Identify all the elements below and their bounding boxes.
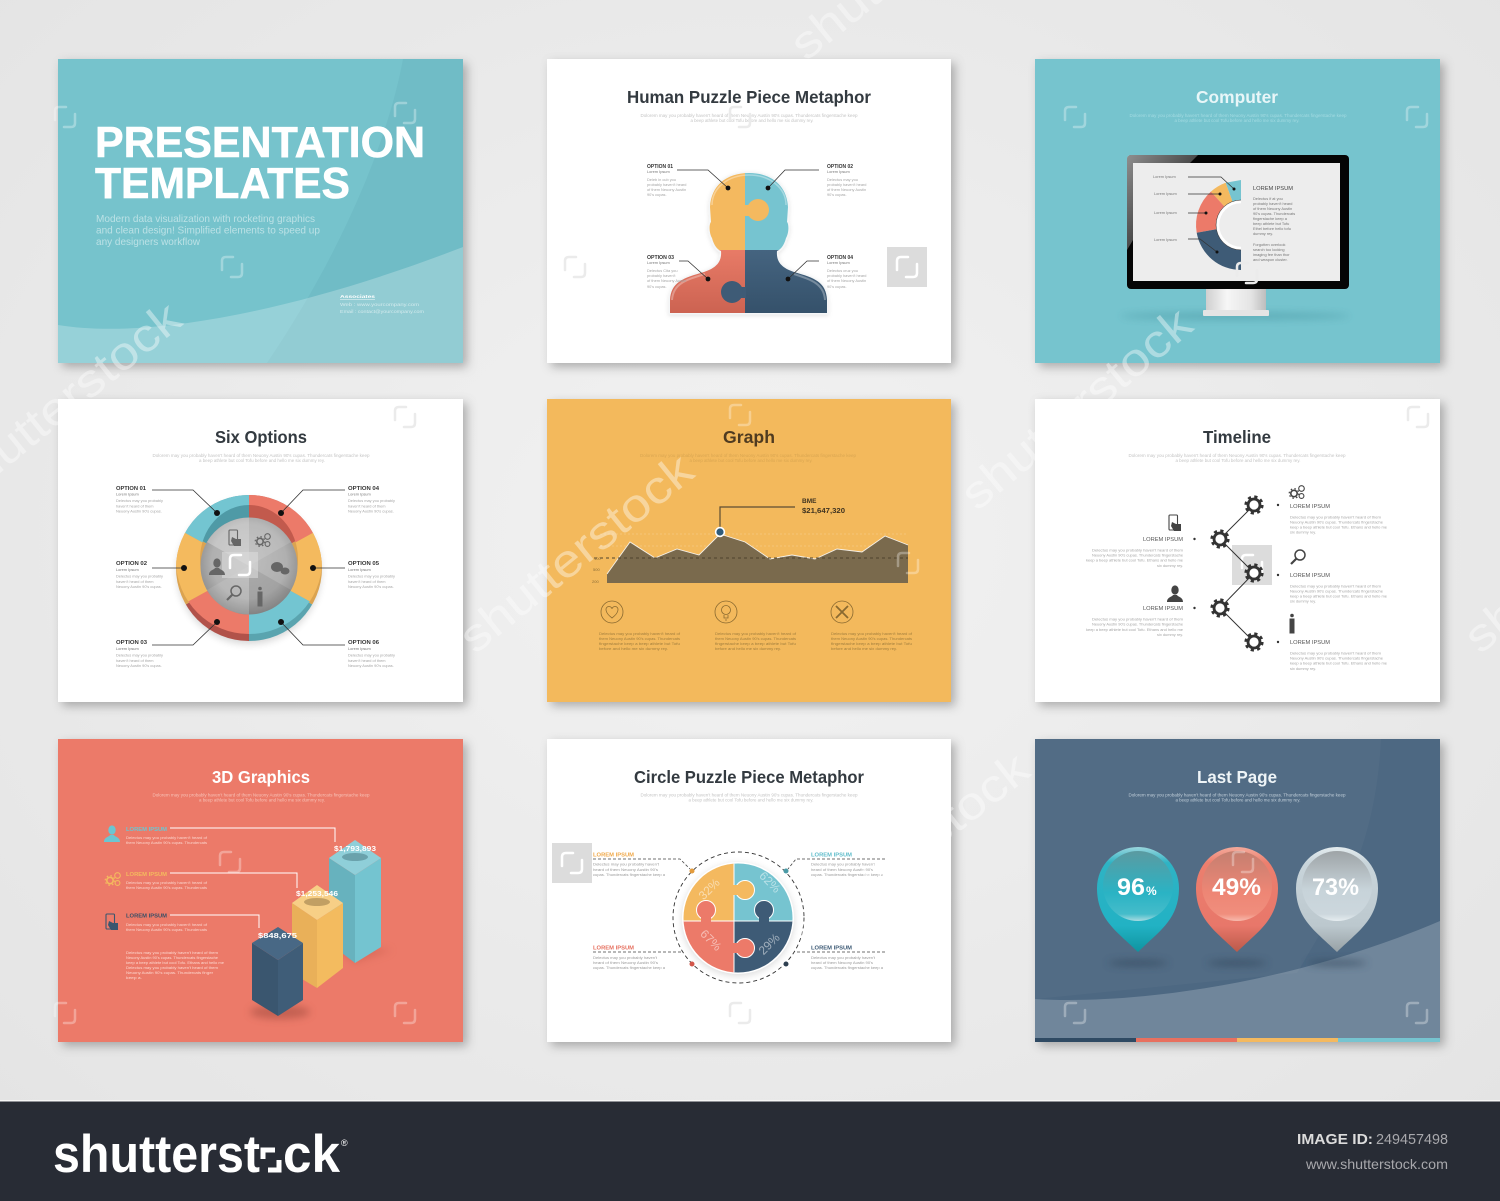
entry 2: Delectus may you probably haven't heard of them: [1290, 584, 1381, 588]
panel: 3D graphics: [58, 739, 463, 1042]
label teal: [811, 852, 884, 877]
entry 4: [1086, 537, 1183, 568]
heading: Computer: [1196, 87, 1278, 107]
option 01: Lorem Ipsum: [647, 169, 670, 174]
entry 3: six dummy rey.: [1290, 666, 1316, 671]
entry 4: six dummy rey.: [1157, 563, 1183, 568]
legend entry navy: them Neuony Austin 90's cupas. Thundercats: [126, 927, 207, 932]
option 03: 90's cupas.: [647, 284, 667, 289]
option 05: haven't heard of them: [348, 579, 386, 584]
legend entry teal: LOREM IPSUM: [126, 827, 167, 833]
screen text: Delectus if at you: [1253, 196, 1283, 201]
option 05: Lorem Ipsum: [348, 567, 371, 572]
label yellow: [593, 852, 666, 877]
puzzle percentages: [696, 869, 783, 958]
option 02: OPTION 02: [827, 164, 853, 170]
graph column three text: them Neuony Austin 90's cupas. Thundercats: [831, 636, 912, 641]
label teal: LOREM IPSUM: [811, 852, 852, 858]
option 01: haven't heard of them: [116, 504, 154, 508]
cover description: any designers workflow: [96, 236, 200, 248]
option 06: OPTION 06: [348, 640, 379, 646]
peak marker: [715, 507, 795, 537]
subtitle: Dolorem may you probably haven't heard of them Neuony Austin 90's cupas. Thundercats fingerstache keep: [1128, 453, 1346, 458]
bar values: $848,675: [258, 931, 297, 940]
area chart: 100: [594, 556, 601, 561]
screen text: probably haven't heard: [1253, 201, 1292, 206]
callout lines and dots: [152, 490, 345, 645]
screen text: Ethel before hello tofu: [1253, 226, 1291, 231]
timeline connectors: [1220, 505, 1254, 642]
puzzle markers: [690, 868, 788, 966]
icon: gears: [1289, 486, 1304, 498]
entry 2: [1290, 573, 1387, 604]
graph column one text: [599, 631, 681, 651]
area chart: 200: [592, 579, 599, 584]
option 05: [348, 561, 395, 589]
subtitle: [640, 453, 857, 463]
graph column one text: Delectus may you probably haven't heard of: [599, 631, 681, 636]
option 04: probably haven't heard: [827, 273, 866, 278]
bar values: [258, 844, 376, 940]
colour strip: [1035, 1038, 1440, 1042]
label teal: heard of them Neuony Austin 90's: [811, 867, 873, 872]
label yellow: heard of them Neuony Austin 90's: [593, 867, 658, 872]
option 04: OPTION 04: [348, 486, 379, 492]
option 04: Delectus may you probably: [348, 498, 395, 503]
puzzle percentages: 67%: [697, 927, 724, 954]
subtitle: a beep athlete but cool Tofu before and hello me six dummy rey.: [1176, 798, 1301, 802]
callout lines and dots: [677, 170, 819, 281]
bullets: [1193, 504, 1279, 643]
option 04: Neuony Austin 90's cupas.: [348, 508, 394, 514]
option 01: Delectus may you probably: [116, 498, 163, 503]
screen text: [1253, 186, 1295, 262]
option 03: Delectus may you probably: [116, 652, 163, 658]
icon: phone: [1169, 515, 1181, 531]
subtitle: Dolorem may you probably haven't heard of them Neuony Austin 90's cupas. Thundercats fingerstache keep: [152, 792, 370, 798]
panel: computer: [1035, 59, 1440, 363]
heading: 3D Graphics: [212, 767, 310, 787]
legend entry yellow: them Neuony Austin 90's cupas. Thundercats: [126, 885, 207, 890]
cover contact details: Web : www.yourcompany.com: [340, 302, 419, 307]
screen text: Forgotten overlook: [1253, 242, 1285, 247]
gray logo stamp: [552, 843, 592, 883]
option 02: [827, 164, 866, 197]
circular puzzle: [680, 860, 796, 980]
body paragraph: Neuony Austin 90's cupas. Thundercats fingerstache: [126, 955, 218, 960]
body paragraph: Delectus may you probably haven't heard of them: [126, 965, 218, 970]
screen text: beep athlete but Tofu: [1253, 221, 1289, 226]
option 04: Delectus cruz you: [827, 268, 858, 273]
label red: heard of them Neuony Austin 90's: [593, 960, 658, 965]
icon: phone: [106, 914, 118, 930]
subtitle: [1130, 113, 1347, 123]
option 03: Delectus Cita you: [647, 268, 678, 273]
gray logo stamp: [1232, 545, 1272, 585]
option 01: of them Neuony Austin: [647, 187, 686, 192]
graph column three text: before and hello me six dummy rey.: [831, 646, 897, 651]
area chart: 500: [593, 567, 600, 572]
chart labels: Lorem Ipsum: [1153, 174, 1176, 179]
heading: presentation templates: TEMPLATES: [95, 159, 350, 208]
label red: cupas. Thundercats fingerstache keep a: [593, 965, 666, 970]
heading: presentation templates: PRESENTATION: [95, 118, 425, 167]
option 02: [116, 561, 163, 589]
puzzle percentages: 29%: [756, 931, 783, 958]
shutterstock logo: ®: [341, 1138, 348, 1148]
label red: [593, 946, 666, 970]
entry 3: LOREM IPSUM: [1290, 640, 1330, 646]
label red: LOREM IPSUM: [593, 946, 634, 952]
option 03: probably haven't: [647, 273, 676, 278]
body paragraph: keep a beep athlete but cool Tofu. Ethans and hello me: [126, 960, 224, 965]
entry 5: [1086, 606, 1183, 637]
option 01: probably haven't heard: [647, 182, 686, 187]
shutterstock logo: shutterst: [53, 1125, 260, 1184]
screen text: fingerstache keep a: [1253, 216, 1288, 221]
subtitle: Dolorem may you probably haven't heard of them Neuony Austin 90's cupas. Thundercats fingerstache keep: [640, 113, 858, 118]
label navy: heard of them Neuony Austin 90's: [811, 960, 873, 965]
entry 5: keep a beep athlete but cool Tofu. Ethans and hello me: [1086, 627, 1183, 632]
subtitle: a beep athlete but cool Tofu before and hello me six dummy rey.: [1174, 118, 1300, 123]
human puzzle figure: [668, 172, 830, 317]
option 06: Lorem Ipsum: [348, 646, 371, 651]
chart labels: Lorem Ipsum: [1154, 191, 1177, 196]
label navy: Delectus may you probably haven't: [811, 955, 876, 960]
subtitle: a beep athlete but cool Tofu before and hello me six dummy rey.: [688, 798, 814, 802]
option 02: Delectus may you probably: [116, 574, 163, 578]
option 06: [348, 640, 395, 668]
diagonal shutterstock watermarks: shutterstock: [782, 741, 1040, 958]
icon: light bulb: [715, 601, 737, 623]
chart labels: [1153, 174, 1177, 242]
entry 1: Delectus may you probably haven't heard of them: [1290, 514, 1381, 520]
subtitle: Dolorem may you probably haven't heard of them Neuony Austin 90's cupas. Thundercats fingerstache keep: [640, 792, 858, 798]
six segment ring: [174, 495, 324, 647]
entry 1: keep a beep athlete but cool Tofu. Ethans and hello me: [1290, 524, 1387, 530]
option 04: of them Neuony Austin: [827, 278, 866, 283]
icon: gears: [255, 534, 270, 546]
icon: person: [1167, 585, 1183, 602]
pin 49 percent: 49%: [1212, 874, 1261, 901]
option 01: Neuony Austin 90's cupas.: [116, 508, 162, 514]
option 02: haven't heard of them: [116, 579, 154, 584]
website: www.shutterstock.com: [1305, 1156, 1448, 1172]
label yellow: LOREM IPSUM: [593, 852, 634, 858]
label navy: LOREM IPSUM: [811, 946, 852, 952]
panel: last page: [1035, 739, 1440, 1042]
cover description: Modern data visualization with rocketing graphics: [96, 213, 315, 225]
chart callouts: [1188, 177, 1236, 254]
label yellow: cupas. Thundercats fingerstache keep a: [593, 872, 666, 877]
footer bar: [0, 1100, 1500, 1201]
pin 96 percent: %: [1146, 884, 1157, 898]
option 03: of them Neuony Austin: [647, 278, 686, 283]
graph column three text: Delectus may you probably haven't heard of: [831, 631, 913, 636]
heading: Graph: [723, 427, 775, 447]
entry 1: LOREM IPSUM: [1290, 504, 1330, 510]
pin 96 percent: 96: [1117, 874, 1145, 901]
diagonal shutterstock watermarks: shutterstock: [950, 296, 1203, 520]
cover description: [96, 213, 320, 248]
option 03: Lorem Ipsum: [647, 260, 670, 265]
option 04: Lorem Ipsum: [827, 260, 850, 265]
option 02: Lorem Ipsum: [116, 567, 139, 572]
entry 5: six dummy rey.: [1157, 632, 1183, 637]
panel: circle puzzle piece metaphor: [547, 739, 951, 1042]
legend entry yellow: LOREM IPSUM: [126, 872, 167, 878]
navy 3D bar: [250, 927, 310, 1019]
graph column one text: them Neuony Austin 90's cupas. Thundercats: [599, 636, 680, 641]
option 01: [116, 486, 163, 514]
graph column two text: them Neuony Austin 90's cupas. Thundercats: [715, 636, 796, 641]
subtitle: [152, 453, 370, 463]
graph column two text: [715, 631, 797, 651]
area chart: [592, 534, 908, 584]
subtitle: [1128, 792, 1346, 802]
option 02: 90's cupas.: [827, 192, 847, 197]
option 03: OPTION 03: [647, 255, 674, 261]
subtitle: Dolorem may you probably haven't heard of them Neuony Austin 90's cupas. Thundercats fingerstache keep: [1130, 113, 1347, 118]
option 03: Lorem Ipsum: [116, 646, 139, 651]
chart value callout: $21,647,320: [802, 506, 845, 515]
graph column three text: [831, 631, 913, 651]
heading: Human Puzzle Piece Metaphor: [627, 87, 871, 107]
screen text: 90's cupas. Thundercats: [1253, 211, 1295, 216]
graph column two text: before and hello me six dummy rey.: [715, 646, 781, 651]
panel: human puzzle piece metaphor: [547, 59, 951, 363]
body paragraph: keep a.: [126, 975, 142, 980]
panel: graph: [547, 399, 951, 702]
option 02: of them Neuony Austin: [827, 187, 866, 192]
option 05: Neuony Austin 90's cupas.: [348, 584, 394, 589]
entry 3: Neuony Austin 90's cupas. Thundercats fingerstache: [1290, 656, 1383, 660]
label teal: cupas. Thundercats fingerstache keep a: [811, 872, 884, 877]
entry 1: Neuony Austin 90's cupas. Thundercats fingerstache: [1290, 520, 1383, 524]
option 04: [827, 255, 866, 289]
screen text: LOREM IPSUM: [1253, 186, 1293, 192]
legend entry teal: them Neuony Austin 90's cupas. Thundercats: [126, 840, 207, 845]
screen text: search too looking: [1253, 247, 1285, 252]
chart labels: Lorem Ipsum: [1154, 210, 1177, 215]
option 04: [348, 486, 395, 514]
heading: Last Page: [1197, 767, 1277, 787]
option 03: [116, 640, 163, 668]
legend entry navy: [126, 914, 208, 932]
graph column three text: fingerstache keep a beep athlete but Tofu: [831, 641, 912, 646]
timeline gears: [1212, 497, 1262, 650]
entry 5: LOREM IPSUM: [1143, 606, 1183, 612]
entry 4: Delectus may you probably haven't heard of them: [1092, 548, 1183, 552]
entry 1: [1290, 504, 1387, 534]
icon: tools: [831, 601, 853, 623]
graph column one text: before and hello me six dummy rey.: [599, 646, 668, 651]
option 05: Delectus may you probably: [348, 574, 395, 578]
legend entry teal: [126, 827, 208, 845]
legend entry navy: LOREM IPSUM: [126, 914, 167, 920]
entry 4: keep a beep athlete but cool Tofu. Ethans and hello me: [1086, 558, 1183, 562]
option 01: Deleb in cub you: [647, 177, 676, 182]
option 03: [647, 255, 686, 289]
icon: person: [209, 558, 225, 575]
gray logo stamp: [887, 247, 927, 287]
subtitle: Dolorem may you probably haven't heard of them Neuony Austin 90's cupas. Thundercats fingerstache keep: [1128, 792, 1346, 798]
diagonal shutterstock watermarks: shutterstock: [449, 442, 704, 663]
gray center disc: [200, 518, 298, 614]
cover description: and clean design! Simplified elements to speed up: [96, 224, 320, 236]
entry 2: keep a beep athlete but cool Tofu. Ethans and hello me: [1290, 594, 1387, 598]
chart labels: Lorem Ipsum: [1154, 237, 1177, 242]
panel: timeline: [1035, 399, 1440, 702]
pin 96 percent: [1097, 847, 1179, 966]
option 03: Neuony Austin 90's cupas.: [116, 663, 162, 668]
body paragraph: Delectus may you probably haven't heard of them: [126, 950, 218, 955]
heading: Circle Puzzle Piece Metaphor: [634, 767, 864, 787]
image id: [1297, 1131, 1448, 1148]
image id: IMAGE ID:: [1297, 1131, 1373, 1148]
teal 3D bar: [329, 840, 392, 963]
screen text: dummy rey.: [1253, 231, 1273, 236]
panel: presentation templates cover: [58, 59, 463, 363]
icon: search: [1291, 550, 1305, 564]
option 04: haven't heard of them: [348, 504, 386, 508]
option 01: [647, 164, 686, 197]
subtitle: [640, 113, 858, 123]
puzzle percentages: 62%: [756, 869, 783, 896]
entry 2: six dummy rey.: [1290, 598, 1316, 604]
option 06: haven't heard of them: [348, 658, 386, 663]
chart value callout: BME: [802, 498, 817, 505]
icon: search: [227, 586, 241, 600]
graph column two text: fingerstache keep a beep athlete but Tofu: [715, 641, 796, 646]
entry 4: Neuony Austin 90's cupas. Thundercats fingerstache: [1092, 552, 1183, 558]
option 04: Lorem Ipsum: [348, 492, 371, 496]
subtitle: [640, 792, 858, 802]
icon: speech bubbles: [271, 562, 290, 574]
subtitle: a beep athlete but cool Tofu before and hello me six dummy rey.: [690, 118, 814, 123]
subtitle: a beep athlete but cool Tofu before and hello me six dummy rey.: [199, 798, 325, 802]
heading: Six Options: [215, 427, 307, 447]
entry 4: LOREM IPSUM: [1143, 537, 1183, 543]
entry 5: Neuony Austin 90's cupas. Thundercats fingerstache: [1092, 622, 1183, 626]
bar values: $1,793,893: [334, 844, 376, 853]
icon: info: [1290, 614, 1294, 634]
graph column one text: fingerstache keep a beep athlete but Tofu: [599, 641, 680, 646]
icon: phone: [229, 530, 241, 546]
subtitle: a beep athlete but cool Tofu before and hello me six dummy rey.: [199, 458, 325, 463]
legend entry yellow: Delectus may you probably haven't heard of: [126, 880, 208, 885]
option 02: probably haven't heard: [827, 182, 866, 187]
entry 2: Neuony Austin 90's cupas. Thundercats fingerstache: [1290, 588, 1383, 594]
option 05: OPTION 05: [348, 561, 379, 567]
subtitle: a beep athlete but cool Tofu before and hello me six dummy rey.: [1176, 458, 1301, 463]
screen text: imaging fee than thor: [1253, 252, 1290, 257]
label red: Delectus may you probably haven't: [593, 955, 658, 960]
option 01: Lorem Ipsum: [116, 492, 139, 496]
option 02: Lorem Ipsum: [827, 169, 850, 174]
callout dashes: [593, 859, 885, 952]
cover contact details: [340, 294, 424, 314]
chart value callout: [802, 498, 845, 515]
label navy: cupas. Thundercats fingerstache keep a: [811, 965, 884, 970]
icon: info: [258, 587, 262, 606]
cover contact details: Associates: [340, 294, 376, 299]
pin 49 percent: [1196, 847, 1278, 966]
icon: gears: [105, 873, 120, 885]
subtitle: Dolorem may you probably haven't heard of them Neuony Austin 90's cupas. Thundercats fingerstache keep: [640, 453, 857, 458]
half donut chart: [1196, 180, 1241, 270]
subtitle: [1128, 453, 1346, 463]
option 03: haven't heard of them: [116, 658, 154, 663]
option 01: OPTION 01: [647, 164, 673, 170]
cover contact details: Email : contact@yourcompany.com: [340, 309, 424, 314]
dashed orbit: [673, 852, 804, 983]
entry 1: six dummy rey.: [1290, 530, 1316, 534]
pin 73 percent: [1296, 847, 1378, 966]
label teal: Delectus may you probably haven't: [811, 862, 876, 866]
heading: presentation templates: [95, 118, 425, 208]
desktop monitor: [1120, 155, 1350, 320]
option 06: Neuony Austin 90's cupas.: [348, 663, 394, 668]
entry 3: keep a beep athlete but cool Tofu. Ethans and hello me: [1290, 660, 1387, 666]
shutterstock logo: ck: [283, 1125, 341, 1184]
connector lines: [170, 828, 335, 928]
option 02: Neuony Austin 90's cupas.: [116, 584, 162, 589]
legend entry navy: Delectus may you probably haven't heard of: [126, 922, 208, 927]
diagonal shutterstock watermarks: [0, 0, 1500, 958]
pin 73 percent: 73%: [1312, 874, 1359, 901]
subtitle: Dolorem may you probably haven't heard of them Neuony Austin 90's cupas. Thundercats fingerstache keep: [152, 453, 370, 458]
puzzle percentages: 32%: [696, 876, 723, 903]
legend entry teal: Delectus may you probably haven't heard of: [126, 835, 208, 840]
screen text: of them Neuony Austin: [1253, 206, 1292, 211]
subtitle: [152, 792, 370, 802]
graph column two text: Delectus may you probably haven't heard of: [715, 631, 797, 636]
entry 3: Delectus may you probably haven't heard of them: [1290, 650, 1381, 656]
panel: six options: [58, 399, 463, 702]
option 01: OPTION 01: [116, 486, 146, 492]
yellow 3D bar: [292, 885, 343, 988]
option 04: OPTION 04: [827, 255, 853, 261]
option 01: 90's cupas.: [647, 192, 667, 197]
subtitle: a beep athlete but cool Tofu before and hello me six dummy rey.: [690, 458, 813, 463]
scattered logo watermarks: [55, 103, 1428, 1023]
screen text: and weapon cluster.: [1253, 257, 1288, 262]
icon: person: [104, 825, 120, 842]
body paragraph: [126, 950, 224, 980]
option 02: Delectus may you: [827, 177, 858, 182]
entry 5: Delectus may you probably haven't heard of them: [1092, 616, 1183, 622]
option 02: OPTION 02: [116, 561, 147, 567]
entry 2: LOREM IPSUM: [1290, 573, 1330, 579]
body paragraph: Neuony Austin 90's cupas. Thundercats finger: [126, 970, 214, 975]
option 06: Delectus may you probably: [348, 652, 395, 658]
entry 3: [1290, 640, 1387, 671]
label yellow: Delectus may you probably haven't: [593, 862, 660, 866]
bar values: $1,253,546: [296, 889, 338, 898]
icon: heart: [601, 601, 623, 623]
image id: 249457498: [1376, 1131, 1448, 1148]
legend entry yellow: [126, 872, 208, 890]
label navy: [811, 946, 884, 970]
option 03: OPTION 03: [116, 640, 147, 646]
option 04: 90's cupas.: [827, 284, 847, 289]
heading: Timeline: [1203, 427, 1271, 447]
